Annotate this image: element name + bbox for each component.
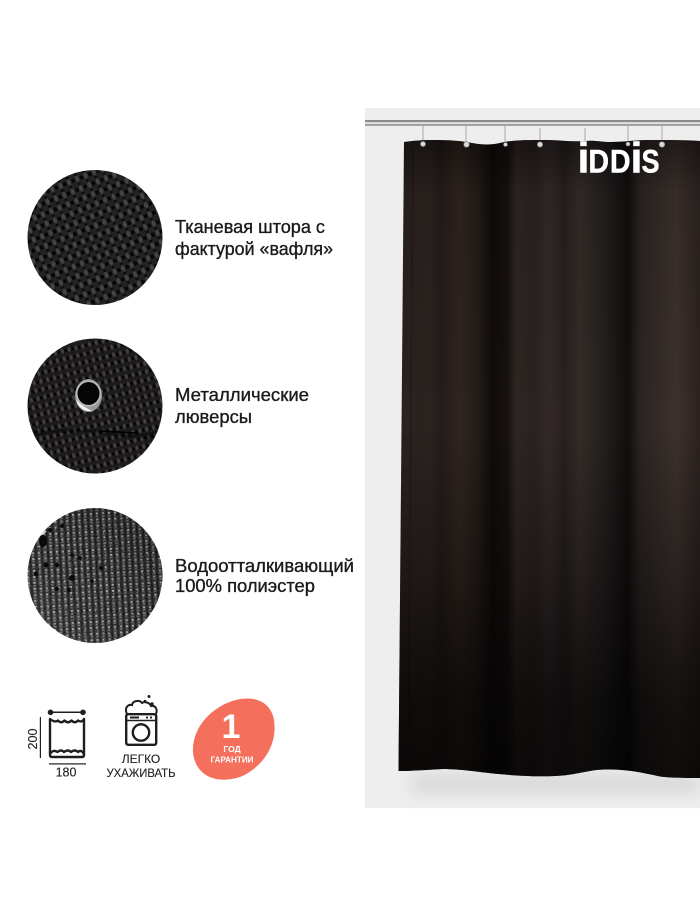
warranty number: 1 <box>222 708 240 746</box>
curtain outline icon <box>50 719 84 757</box>
heading: water-repellent polyester: 100% полиэстер <box>175 576 315 596</box>
logo: iDDiS: i <box>578 134 589 182</box>
curtain rod icon <box>48 710 86 715</box>
logo: iDDiS: D <box>588 144 609 180</box>
logo: iDDiS <box>578 134 660 182</box>
height dimension line <box>40 717 41 758</box>
bubbles <box>144 695 154 706</box>
heading: water-repellent polyester <box>175 556 354 596</box>
infographic canvas <box>28 108 700 808</box>
heading: waffle fabric: Тканевая штора с <box>175 217 325 237</box>
curtain fabric <box>398 140 700 778</box>
heading: metal grommets <box>175 385 309 427</box>
label: easy care: ЛЕГКО <box>122 752 160 766</box>
washer door <box>133 724 149 741</box>
photo: waffle fabric texture <box>28 170 162 305</box>
heading: metal grommets: Металлические <box>175 385 309 405</box>
heading: waffle fabric: фактурой «вафля» <box>175 239 333 259</box>
label: easy care: УХАЖИВАТЬ <box>106 766 176 780</box>
logo: iDDiS: D <box>610 144 630 180</box>
soap suds <box>126 701 157 714</box>
heading: metal grommets: люверсы <box>175 407 252 427</box>
curtain hooks <box>423 126 662 142</box>
photo background <box>365 108 700 808</box>
heading: waffle fabric <box>175 217 333 259</box>
washer body <box>126 714 156 745</box>
hem crease <box>100 431 138 433</box>
control strip <box>126 720 156 722</box>
curtain grommets <box>420 141 665 147</box>
curtain rod <box>365 120 700 126</box>
warranty caption: ГОД <box>223 744 241 754</box>
fabric hem fold <box>27 429 165 439</box>
grommet ring <box>75 379 102 412</box>
height label: 200 <box>26 728 40 750</box>
water drops <box>34 524 103 592</box>
icon: washing machine <box>126 695 157 745</box>
panel: curtain photo <box>365 108 700 808</box>
curtain shadow on floor <box>412 776 700 792</box>
badge: 1 year warranty <box>193 699 275 780</box>
heading: water-repellent polyester: Водоотталкивающий <box>175 556 354 576</box>
badge blob <box>193 699 275 780</box>
label: easy care <box>106 752 176 780</box>
logo: iDDiS: S <box>642 144 660 180</box>
icon: curtain size 200 x 180 <box>26 710 86 780</box>
photo: metal grommet <box>27 338 165 474</box>
width dimension line <box>49 763 86 764</box>
photo: water-repellent fabric <box>27 507 163 644</box>
warranty caption: ГАРАНТИИ <box>210 754 254 764</box>
width label: 180 <box>56 766 76 780</box>
logo: iDDiS: i <box>630 134 642 182</box>
warranty caption <box>210 744 254 764</box>
